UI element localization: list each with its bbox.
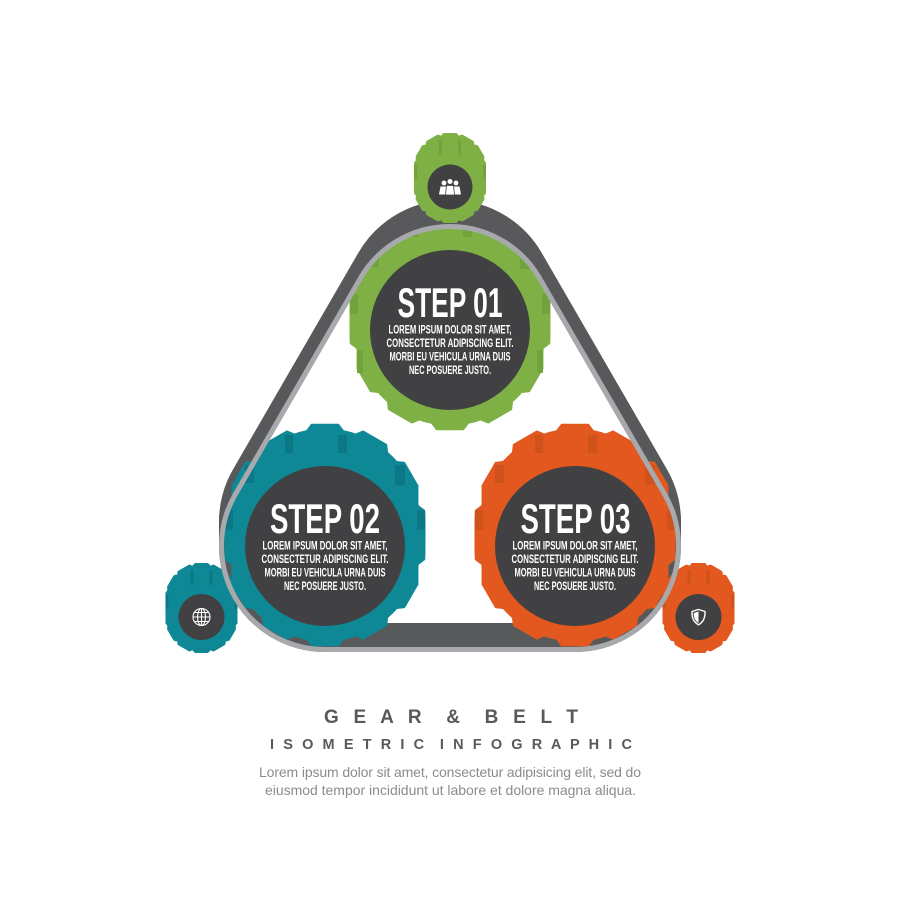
text block: step 02: MORBI EU VEHICULA URNA DUIS bbox=[264, 568, 386, 580]
belt: dark inner wall bbox=[222, 203, 678, 650]
panel: step 01 bbox=[370, 250, 530, 410]
icon: globe bbox=[178, 594, 224, 640]
text block: step 03: CONSECTETUR ADIPISCING ELIT. bbox=[512, 554, 638, 566]
gear: step 01 green bbox=[350, 208, 550, 430]
heading: step 01: STEP 01 bbox=[398, 279, 502, 326]
text block: step 01: NEC POSUERE JUSTO. bbox=[409, 365, 491, 377]
gear: step 03 orange bbox=[475, 424, 675, 646]
small gear: left teal bbox=[166, 564, 238, 652]
panel: step 02 bbox=[245, 466, 405, 626]
small gear: top green bbox=[414, 134, 486, 222]
title: G E A R & B E L T bbox=[324, 707, 578, 728]
text block: step 02: LOREM IPSUM DOLOR SIT AMET, bbox=[262, 540, 388, 552]
text block: step 01: MORBI EU VEHICULA URNA DUIS bbox=[390, 352, 511, 364]
description: eiusmod tempor incididunt ut labore et dolore magna aliqua. bbox=[265, 782, 636, 798]
panel: step 03 bbox=[495, 466, 655, 626]
infographic: gear and belt bbox=[166, 133, 734, 798]
text block: step 03 bbox=[512, 540, 638, 593]
description bbox=[259, 764, 641, 798]
subtitle: I S O M E T R I C I N F O G R A P H I C bbox=[270, 737, 633, 753]
gear: step 02 teal bbox=[225, 424, 425, 646]
text block: step 03: NEC POSUERE JUSTO. bbox=[534, 581, 616, 593]
heading: step 03: STEP 03 bbox=[520, 495, 630, 542]
heading: step 02: STEP 02 bbox=[270, 495, 380, 542]
icon: shield bbox=[676, 594, 722, 640]
text block: step 03: MORBI EU VEHICULA URNA DUIS bbox=[514, 568, 636, 580]
text block: step 01 bbox=[386, 324, 514, 377]
belt: light front edge bbox=[222, 227, 678, 650]
text block: step 03: LOREM IPSUM DOLOR SIT AMET, bbox=[512, 540, 638, 552]
text block: step 02 bbox=[262, 540, 388, 593]
text block: step 01: CONSECTETUR ADIPISCING ELIT. bbox=[386, 338, 514, 350]
small gear: right orange bbox=[662, 564, 734, 652]
description: Lorem ipsum dolor sit amet, consectetur adipisicing elit, sed do bbox=[259, 764, 641, 780]
text block: step 02: CONSECTETUR ADIPISCING ELIT. bbox=[262, 554, 388, 566]
text block: step 02: NEC POSUERE JUSTO. bbox=[284, 581, 366, 593]
text block: step 01: LOREM IPSUM DOLOR SIT AMET, bbox=[388, 324, 512, 336]
icon: people bbox=[428, 164, 472, 210]
